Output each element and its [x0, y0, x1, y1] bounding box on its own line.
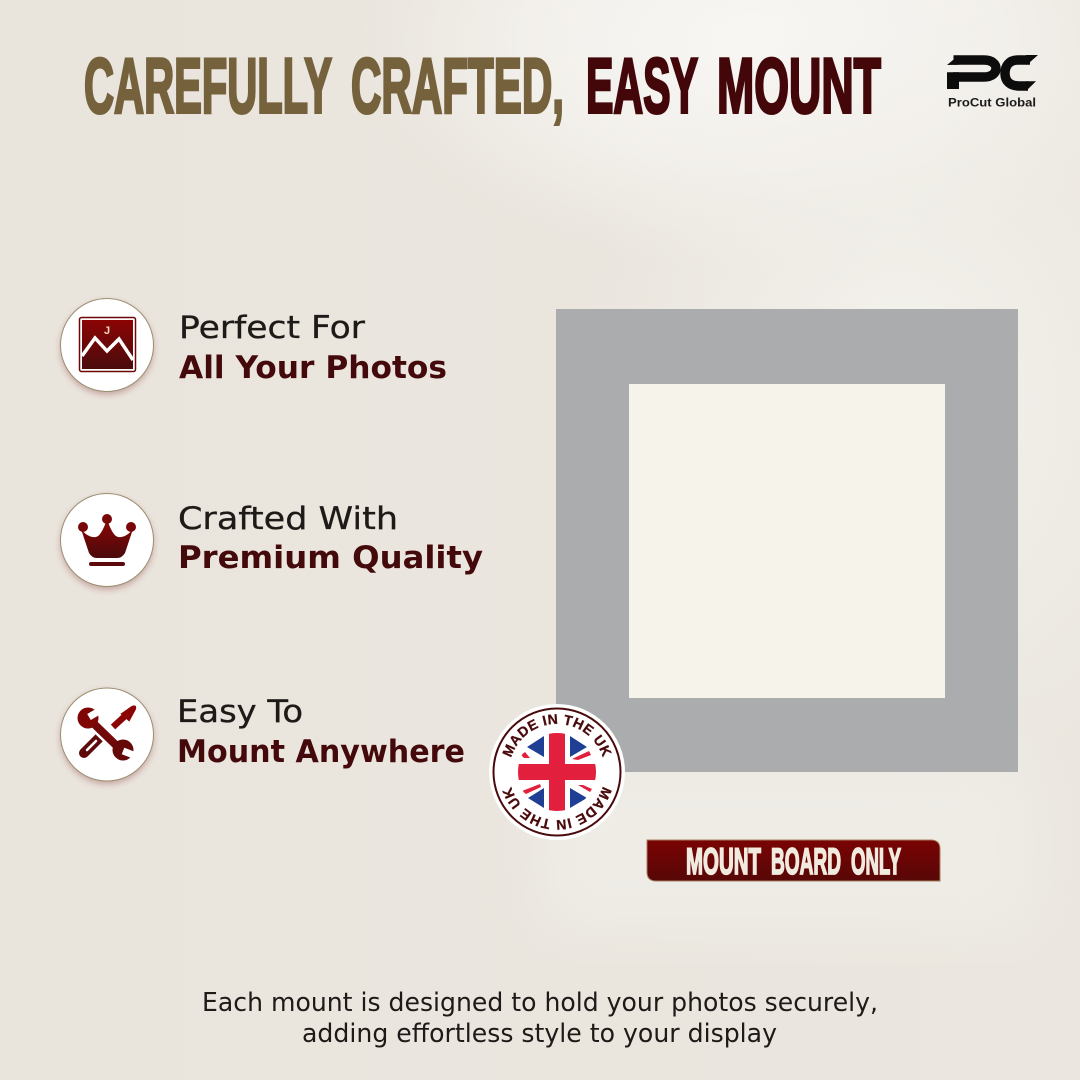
caption line 2: adding effortless style to your display	[302, 1019, 777, 1049]
icon: tools	[60, 688, 154, 781]
logo mark: PC	[947, 55, 1038, 91]
feature: easy to mount anywhere	[60, 688, 465, 781]
title: easy mount: MOUNT	[717, 42, 881, 130]
label text: BOARD	[771, 841, 841, 882]
text: premium quality: Premium Quality	[178, 540, 483, 576]
label text	[686, 841, 901, 882]
logo: ProCut Global	[947, 55, 1038, 110]
board window	[629, 384, 945, 698]
label text: ONLY	[851, 841, 901, 882]
logo text: ProCut Global	[948, 96, 1036, 110]
title: easy mount: EASY	[586, 42, 698, 130]
text: mount anywhere: Mount Anywhere	[177, 734, 465, 770]
mount board	[556, 309, 1018, 772]
caption	[202, 988, 878, 1049]
badge: made in the uk	[489, 704, 625, 840]
title	[84, 42, 881, 130]
badge text: top: MADE IN THE UK	[502, 714, 612, 758]
title: carefully crafted: CAREFULLY	[84, 42, 332, 130]
text: perfect for: Perfect For	[179, 310, 365, 346]
text: crafted with: Crafted With	[178, 501, 398, 537]
caption line 1: Each mount is designed to hold your photos securely,	[202, 988, 878, 1018]
icon: union flag	[518, 733, 596, 811]
board frame	[556, 309, 1018, 772]
icon: crown	[60, 494, 154, 586]
label: mount board only	[647, 840, 940, 882]
label text: MOUNT	[686, 841, 761, 882]
feature: perfect for all your photos	[60, 298, 447, 392]
icon: photo: J	[104, 325, 110, 337]
icon: photo	[60, 298, 154, 392]
badge text: bottom: MADE IN THE UK	[502, 786, 612, 830]
feature: crafted with premium quality	[60, 494, 483, 586]
text: easy to: Easy To	[177, 694, 303, 730]
text: all your photos: All Your Photos	[179, 350, 447, 386]
title: carefully crafted: CRAFTED,	[351, 42, 564, 130]
